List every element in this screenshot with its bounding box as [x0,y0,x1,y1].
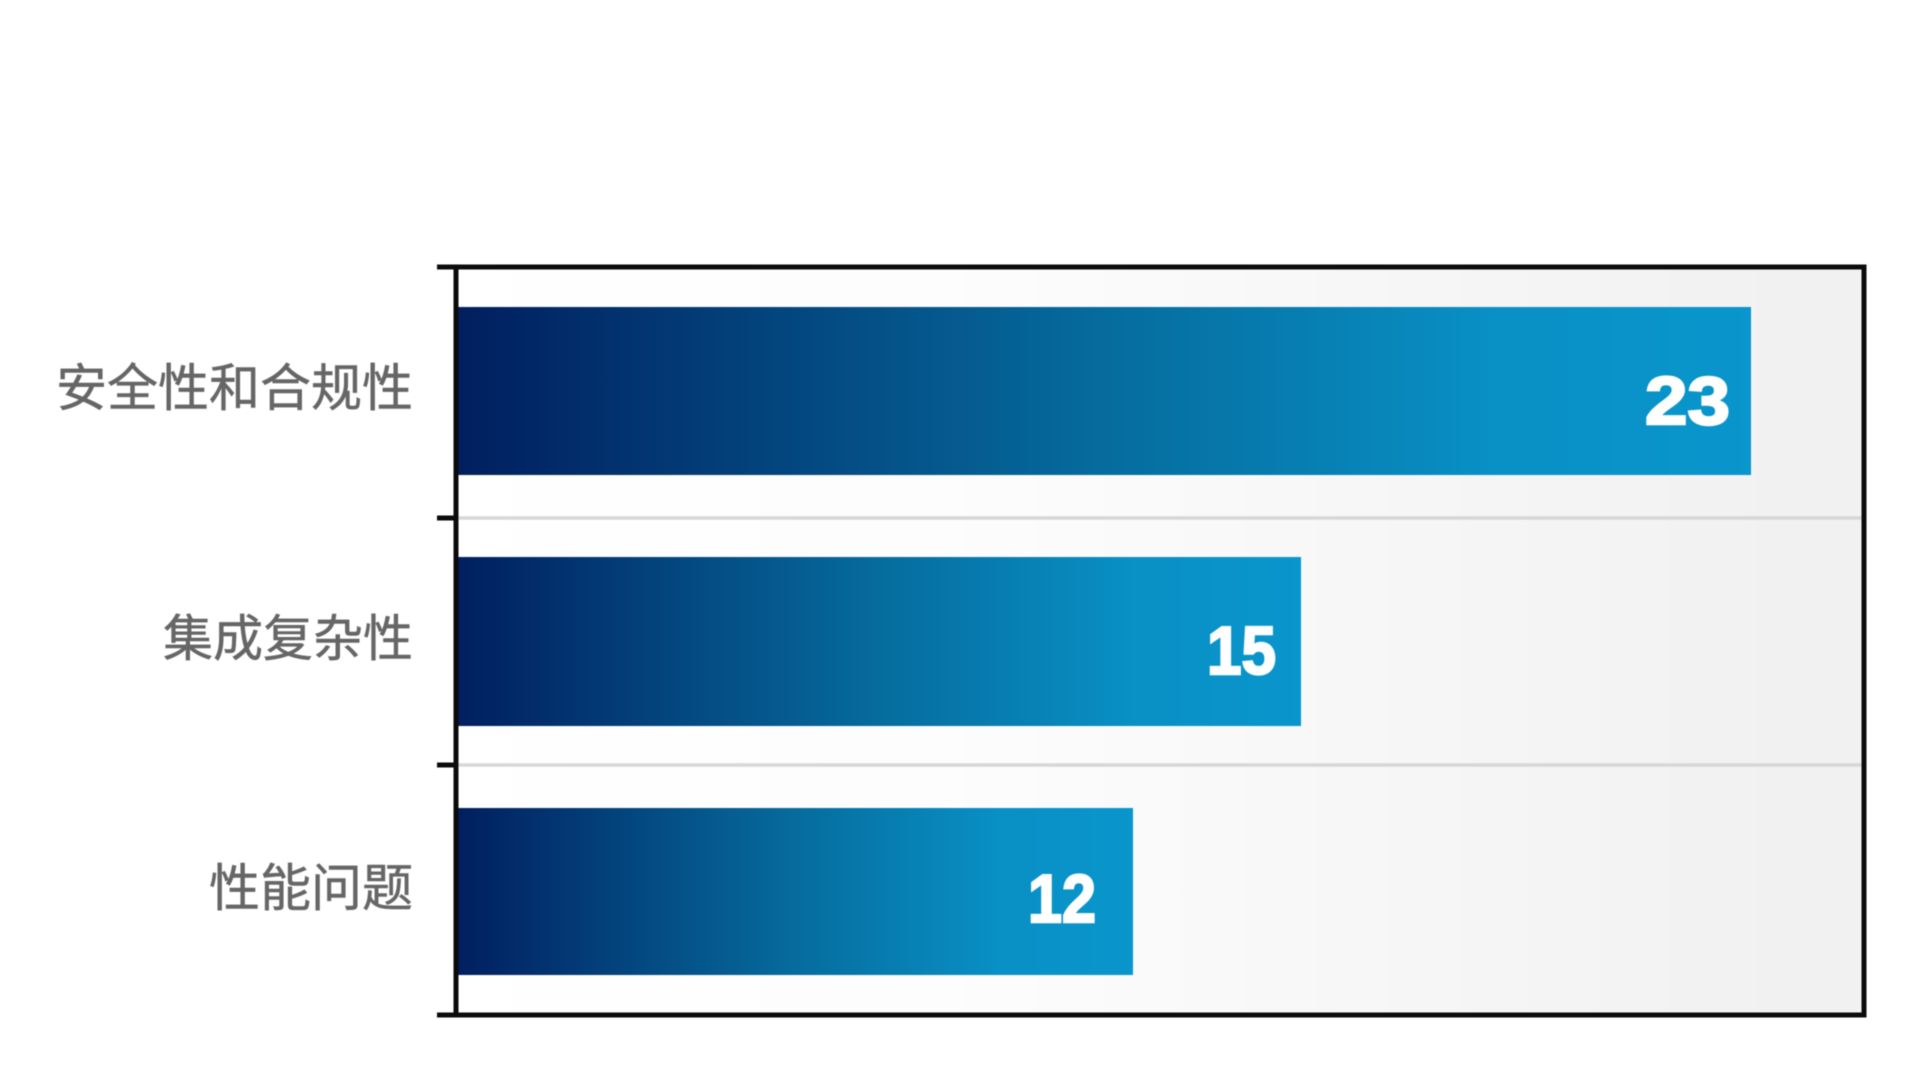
bar: 集成复杂性 [458,557,1301,726]
value: 12: 12 [1028,861,1096,937]
bar: 安全性和合规性 [458,307,1751,475]
plot area background [456,267,1864,1015]
axis frame and ticks [437,267,1864,1015]
bar: 性能问题 [458,808,1133,975]
value: 15: 15 [1207,613,1276,689]
value: 23: 23 [1645,363,1730,439]
label: 集成复杂性: 集成复杂性 [163,611,413,667]
label: 安全性和合规性: 安全性和合规性 [56,360,413,417]
row separators [458,518,1862,765]
label: 性能问题: 性能问题 [209,860,413,917]
